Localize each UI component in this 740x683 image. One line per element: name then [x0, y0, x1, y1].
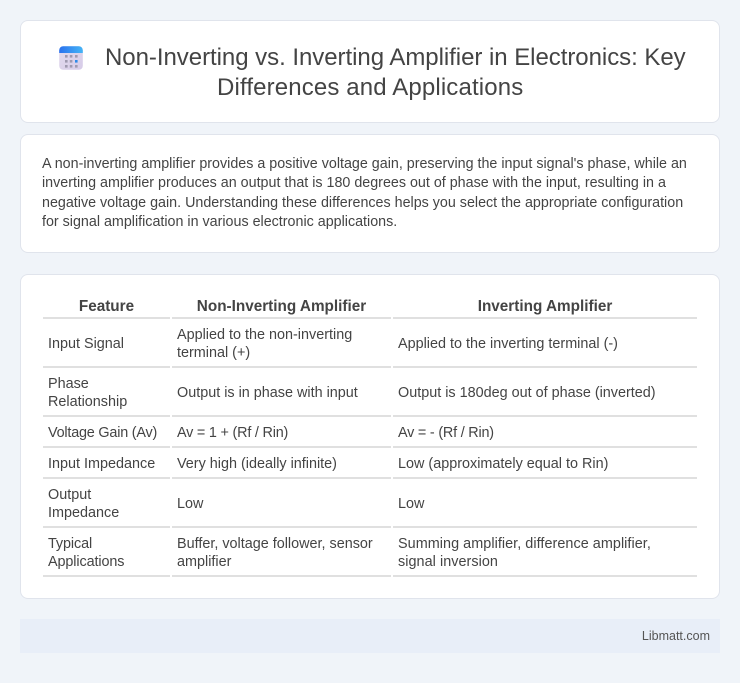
row: input impedance: Input Impedance	[48, 456, 155, 472]
title: Non-Inverting vs. Inverting Amplifier in Electronics: Key	[105, 44, 686, 71]
applications, inverting: signal inversion	[398, 554, 498, 570]
row: output impedance: Impedance	[48, 505, 119, 521]
input signal, non-inverting	[177, 327, 352, 361]
applications, non-inverting: amplifier	[177, 554, 231, 570]
title: Differences and Applications	[217, 74, 523, 101]
intro paragraph	[42, 156, 687, 230]
voltage gain, inverting: Av = - (Rf / Rin)	[398, 425, 494, 441]
panel: title card	[20, 20, 720, 123]
applications, inverting: Summing amplifier, difference amplifier,	[398, 536, 651, 552]
row: typical applications: Applications	[48, 554, 124, 570]
input signal, inverting: Applied to the inverting terminal (-)	[398, 336, 618, 352]
row: typical applications: Typical	[48, 536, 92, 552]
row: phase relationship: Phase	[48, 376, 89, 392]
footer bar	[20, 619, 720, 653]
icon: calendar	[59, 46, 83, 70]
intro paragraph: for signal amplification in various electronic applications.	[42, 214, 397, 230]
input signal, non-inverting: Applied to the non-inverting	[177, 327, 352, 343]
panel: intro text	[20, 134, 720, 253]
row: phase relationship: Relationship	[48, 394, 127, 410]
phase, non-inverting: Output is in phase with input	[177, 385, 358, 401]
row: input signal: Input Signal	[48, 336, 124, 352]
output impedance, non-inverting: Low	[177, 496, 203, 512]
panel: comparison table	[20, 274, 720, 599]
applications, inverting	[398, 536, 651, 570]
phase, inverting: Output is 180deg out of phase (inverted)	[398, 385, 656, 401]
applications, non-inverting	[177, 536, 373, 570]
header: Inverting Amplifier: Inverting Amplifier	[478, 298, 612, 315]
title	[105, 44, 686, 101]
footer credit: Libmatt.com	[642, 629, 710, 643]
row: output impedance	[48, 487, 119, 521]
row: voltage gain: Voltage Gain (Av)	[48, 425, 157, 441]
input signal, non-inverting: terminal (+)	[177, 345, 250, 361]
comparison table	[43, 297, 697, 577]
row: phase relationship	[48, 376, 127, 410]
input impedance, inverting: Low (approximately equal to Rin)	[398, 456, 608, 472]
output impedance, inverting: Low	[398, 496, 424, 512]
row: output impedance: Output	[48, 487, 91, 503]
intro paragraph: inverting amplifier produces an output that is 180 degrees out of phase with the input, resulting in a	[42, 175, 666, 191]
header: Feature: Feature	[79, 298, 134, 315]
applications, non-inverting: Buffer, voltage follower, sensor	[177, 536, 373, 552]
intro paragraph: A non-inverting amplifier provides a positive voltage gain, preserving the input signal's phase, while an	[42, 156, 687, 172]
header: Non-Inverting Amplifier: Non-Inverting Amplifier	[197, 298, 366, 315]
row: typical applications	[48, 536, 124, 570]
input impedance, non-inverting: Very high (ideally infinite)	[177, 456, 337, 472]
voltage gain, non-inverting: Av = 1 + (Rf / Rin)	[177, 425, 288, 441]
intro paragraph: negative voltage gain. Understanding these differences helps you select the appropriate configuration	[42, 194, 683, 210]
